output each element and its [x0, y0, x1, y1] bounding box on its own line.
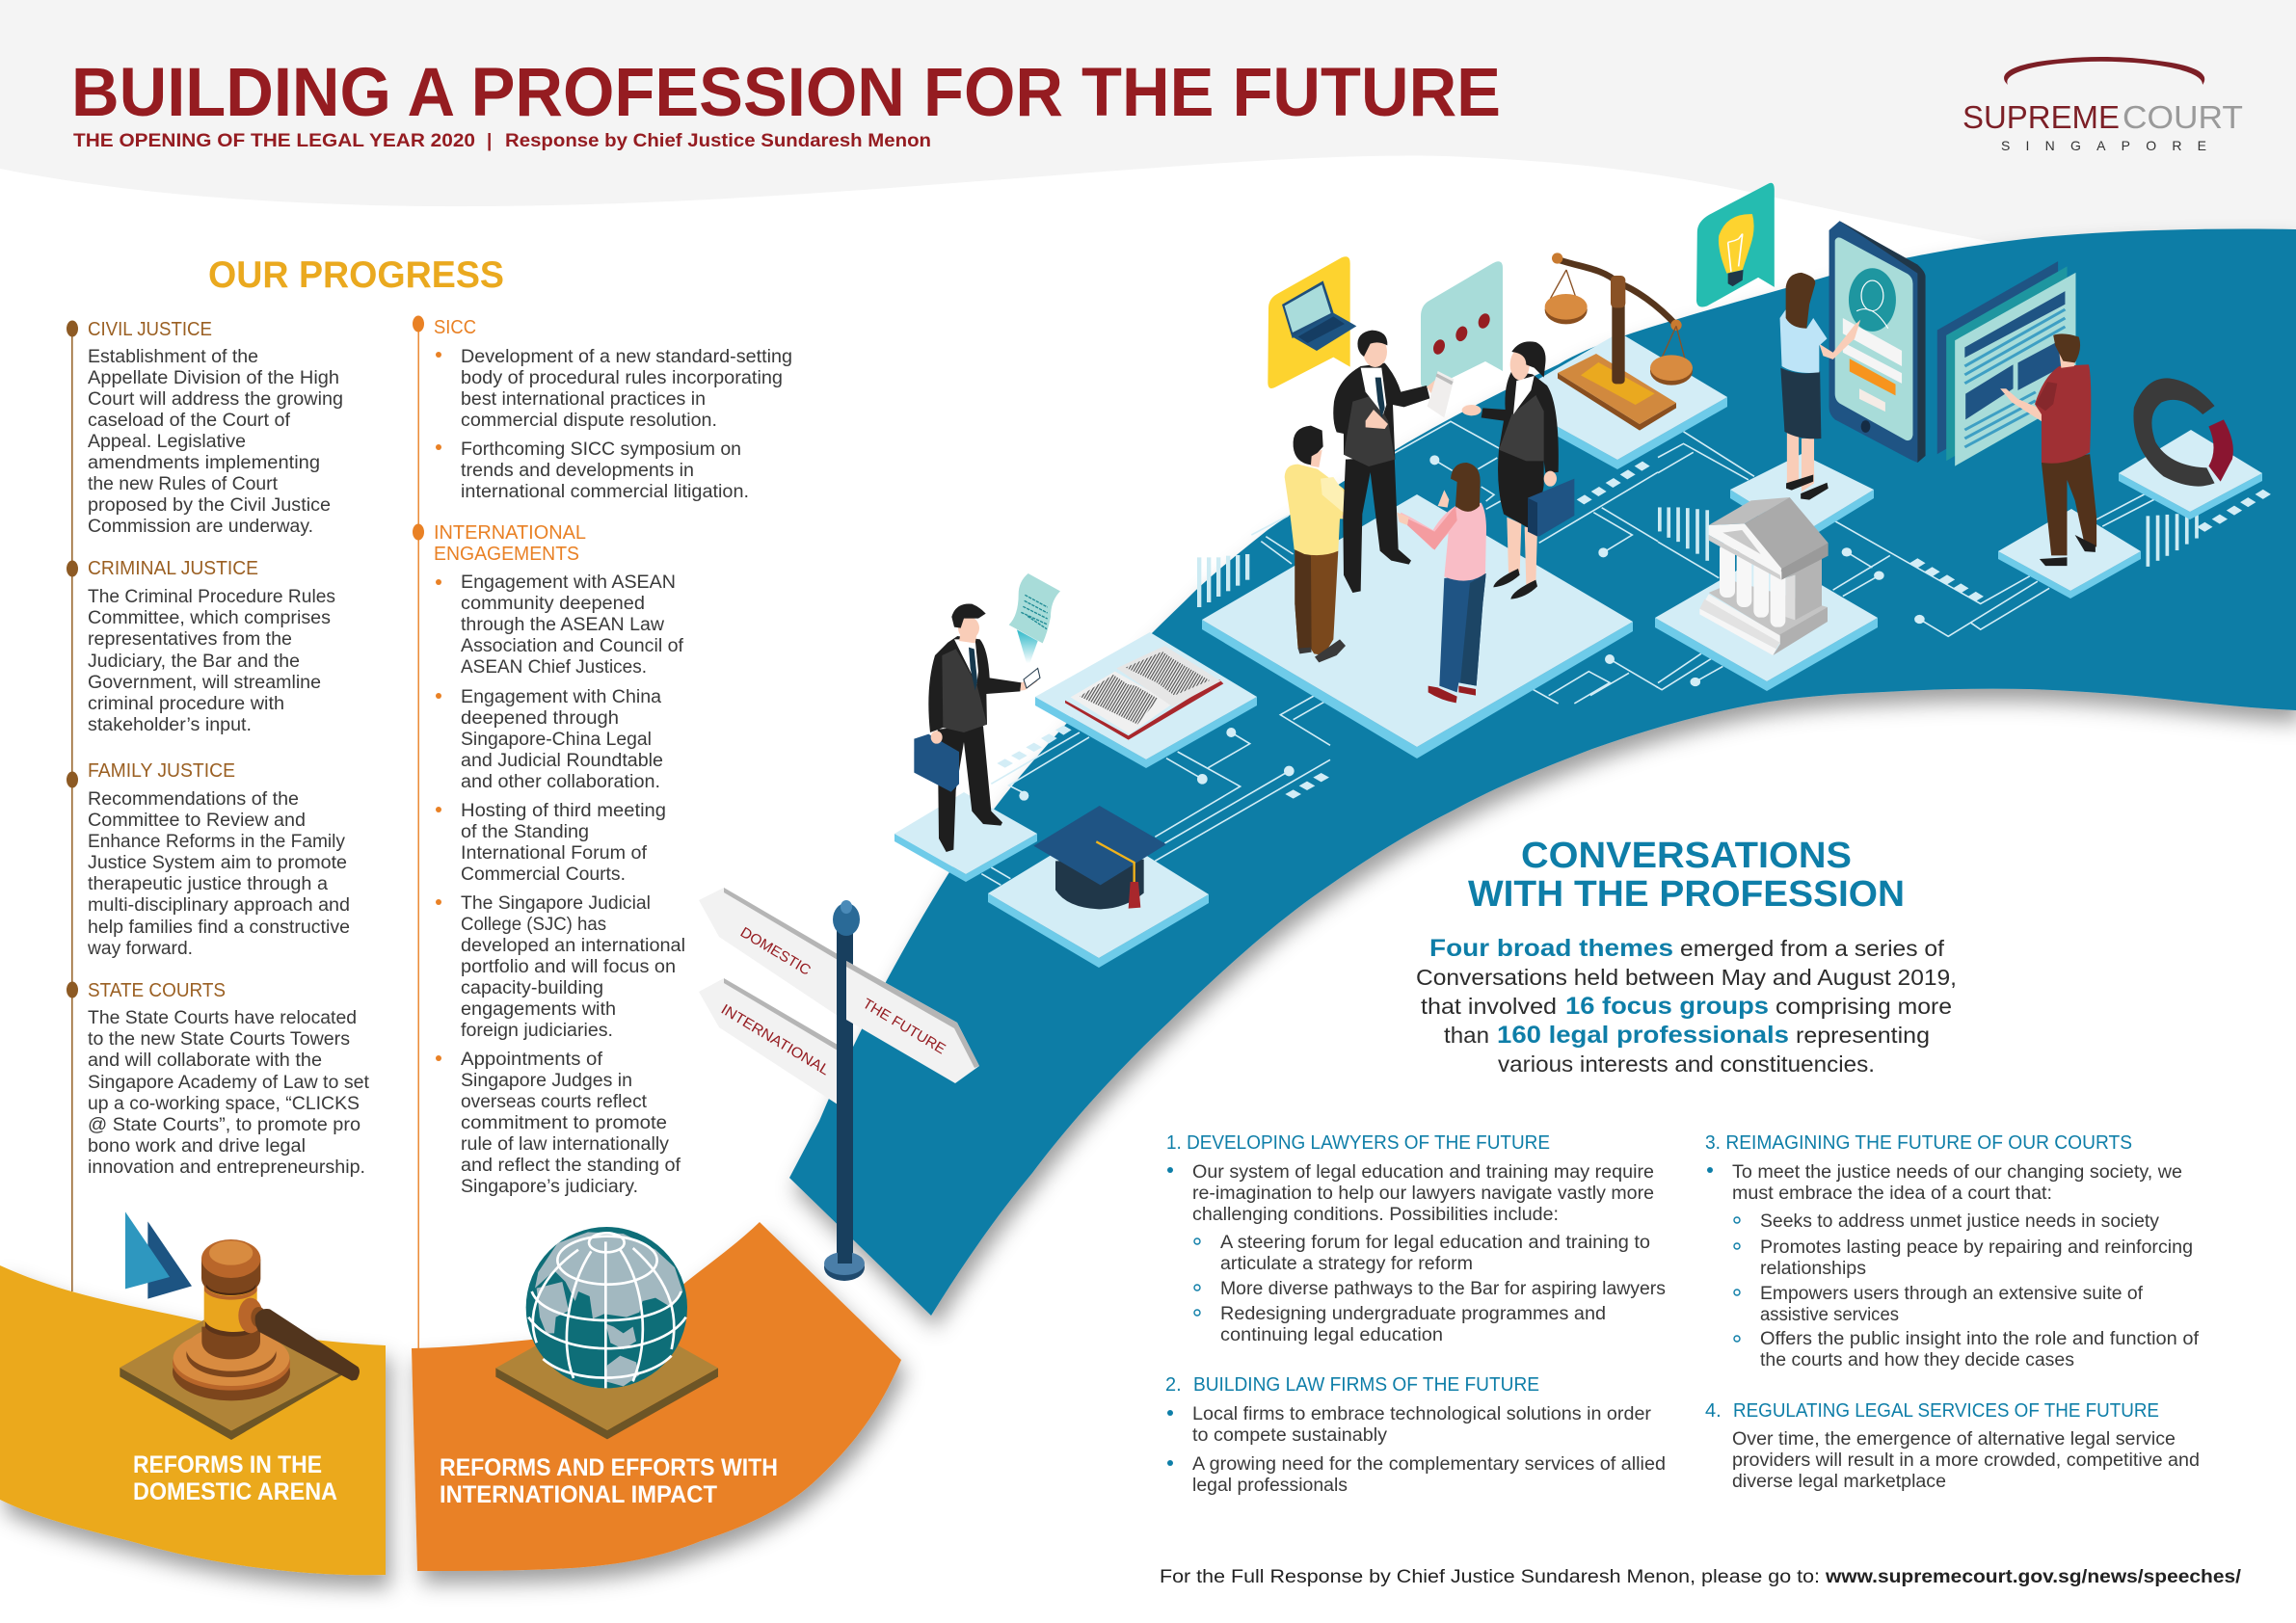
- icon: floating document: [1009, 573, 1060, 663]
- icon: courthouse: [1699, 497, 1829, 655]
- text block: international engagements: Singapore-China Legal: [461, 730, 652, 750]
- text block: SICC: international commercial litigation.: [461, 482, 749, 502]
- logo: Supreme Court Singapore: SUPREME: [1962, 99, 2120, 135]
- text block: international engagements: Singapore’s judiciary.: [461, 1177, 638, 1197]
- text block: theme 1: More diverse pathways to the Bar for aspiring lawyers: [1220, 1279, 1666, 1299]
- circuit lines and stripes: [981, 421, 2271, 885]
- icon: paper handed over: [1428, 371, 1454, 417]
- icon: globe on base: [495, 1227, 718, 1439]
- text block: state courts: and will collaborate with the: [88, 1051, 322, 1071]
- text block: theme 2: [1165, 1374, 1666, 1496]
- platform: chart: [2119, 430, 2262, 519]
- label: reforms in the domestic arena: REFORMS IN THE: [133, 1451, 322, 1478]
- text block: international engagements: College (SJC) has: [461, 915, 606, 935]
- text block: criminal justice: The Criminal Procedure Rules: [88, 587, 335, 607]
- text block: civil justice: Appeal. Legislative: [88, 432, 246, 452]
- label: reforms in the domestic arena: DOMESTIC ARENA: [133, 1478, 337, 1505]
- text block: international engagements: engagements with: [461, 999, 616, 1020]
- text block: theme 3: relationships: [1760, 1259, 1866, 1279]
- text block: theme 2: A growing need for the complementary services of allied: [1192, 1454, 1666, 1475]
- text block: SICC: Forthcoming SICC symposium on: [461, 439, 741, 460]
- platform: main: [1202, 494, 1633, 758]
- text block: international engagements: Singapore Judges in: [461, 1071, 632, 1091]
- panel: yellow domestic band: [0, 1265, 386, 1575]
- text block: conversations intro: Four broad themes: [1429, 935, 1673, 962]
- text block: conversations intro: [1416, 935, 1957, 1077]
- text block: conversations intro: 160 legal professionals: [1497, 1022, 1789, 1049]
- icon: webpage panels: [1937, 261, 2075, 466]
- heading: conversations with the profession: CONVERSATIONS: [1521, 836, 1852, 876]
- figure: woman in black suit: [1462, 341, 1574, 599]
- text block: criminal justice: representatives from the: [88, 629, 292, 650]
- text block: international engagements: community deepened: [461, 594, 645, 614]
- subtitle: |: [487, 131, 492, 151]
- text block: conversations intro: comprising more: [1775, 994, 1952, 1019]
- text block: theme 3: must embrace the idea of a court that:: [1732, 1184, 2052, 1204]
- label: reforms with international impact: INTERNATIONAL IMPACT: [440, 1481, 717, 1508]
- text block: civil justice: [88, 319, 343, 537]
- text block: theme 3: Offers the public insight into the role and function of: [1760, 1329, 2200, 1349]
- text block: theme 1: articulate a strategy for reform: [1220, 1254, 1473, 1274]
- footer: link to full response: www.supremecourt.gov.sg/news/speeches/: [1825, 1567, 2242, 1587]
- text block: family justice: help families find a constructive: [88, 918, 350, 938]
- icon: graduation cap: [1033, 806, 1166, 909]
- text block: theme 2: BUILDING LAW FIRMS OF THE FUTURE: [1193, 1374, 1539, 1396]
- text block: international engagements: ASEAN Chief Justices.: [461, 657, 647, 678]
- text block: state courts: STATE COURTS: [88, 980, 226, 1001]
- text block: state courts: [88, 980, 370, 1178]
- sign: the future: [846, 961, 979, 1083]
- text block: international engagements: and reflect the standing of: [461, 1156, 681, 1176]
- heading: conversations with the profession: WITH THE PROFESSION: [1468, 874, 1905, 915]
- text block: international engagements: overseas courts reflect: [461, 1092, 648, 1112]
- text block: international engagements: INTERNATIONAL: [434, 522, 586, 544]
- text block: SICC: Development of a new standard-setting: [461, 347, 792, 367]
- text block: state courts: to the new State Courts Towers: [88, 1029, 350, 1050]
- text block: international engagements: foreign judiciaries.: [461, 1021, 613, 1041]
- text block: theme 4: [1705, 1400, 2200, 1492]
- icon: donut chart: [2133, 378, 2233, 487]
- text block: theme 1: Our system of legal education and training may require: [1192, 1162, 1654, 1183]
- platform: courthouse: [1655, 553, 1878, 691]
- text block: international engagements: through the ASEAN Law: [461, 615, 664, 635]
- figure: woman at phone: [1780, 273, 1860, 500]
- text block: civil justice: amendments implementing: [88, 453, 320, 473]
- text block: criminal justice: Committee, which comprises: [88, 608, 331, 628]
- platform: scales: [1506, 333, 1727, 469]
- text block: civil justice: Establishment of the: [88, 347, 258, 367]
- subtitle: Response by Chief Justice Sundaresh Menon: [505, 131, 931, 151]
- figure: man in black suit: [1333, 331, 1436, 593]
- text block: conversations intro: Conversations held between May and August 2019,: [1416, 965, 1957, 990]
- text block: theme 2: legal professionals: [1192, 1476, 1348, 1496]
- text block: SICC: body of procedural rules incorporating: [461, 368, 783, 388]
- text block: family justice: multi-disciplinary approach and: [88, 895, 350, 916]
- text block: international engagements: The Singapore Judicial: [461, 893, 651, 914]
- label: reforms with international impact: REFORMS AND EFFORTS WITH: [440, 1454, 778, 1481]
- text block: family justice: Enhance Reforms in the Family: [88, 832, 345, 852]
- figure: man in red shirt: [2000, 333, 2096, 566]
- text block: theme 3: Promotes lasting peace by repairing and reinforcing: [1760, 1237, 2193, 1258]
- text block: civil justice: the new Rules of Court: [88, 474, 279, 494]
- text block: international engagements: Engagement with ASEAN: [461, 572, 676, 593]
- text block: conversations intro: that involved: [1421, 994, 1557, 1019]
- text block: theme 3: Seeks to address unmet justice needs in society: [1760, 1211, 2159, 1232]
- text block: international engagements: [434, 522, 685, 1197]
- figure: man in yellow shirt: [1285, 426, 1356, 662]
- logo: Supreme Court Singapore: [1962, 57, 2243, 153]
- footer: link to full response: [1160, 1567, 2242, 1587]
- text block: international engagements: Hosting of third meeting: [461, 801, 666, 821]
- text block: family justice: Committee to Review and: [88, 811, 306, 831]
- text block: international engagements: rule of law internationally: [461, 1134, 670, 1155]
- text block: international engagements: deepened through: [461, 708, 619, 729]
- platform: graduation cap: [988, 826, 1209, 968]
- text block: SICC: commercial dispute resolution.: [461, 411, 717, 431]
- signpost: [699, 888, 979, 1281]
- text block: state courts: Singapore Academy of Law to set: [88, 1073, 370, 1093]
- text block: family justice: way forward.: [87, 939, 193, 959]
- pole: [837, 916, 853, 1264]
- text block: international engagements: commitment to promote: [461, 1113, 667, 1133]
- text block: criminal justice: stakeholder’s input.: [88, 715, 252, 735]
- platform: book: [1035, 632, 1257, 768]
- subtitle: THE OPENING OF THE LEGAL YEAR 2020: [73, 131, 475, 151]
- text block: theme 4: providers will result in a more crowded, competitive and: [1732, 1450, 2200, 1471]
- text block: international engagements: Commercial Courts.: [461, 865, 626, 885]
- text block: theme 1: 1. DEVELOPING LAWYERS OF THE FUTURE: [1166, 1132, 1550, 1154]
- panel: orange international band: [412, 1222, 901, 1571]
- text block: international engagements: portfolio and will focus on: [461, 957, 676, 977]
- logo: Supreme Court Singapore: COURT: [2122, 99, 2243, 135]
- icon: lightbulb bubble: [1696, 183, 1775, 307]
- sign: the future: THE FUTURE: [860, 996, 948, 1057]
- text block: criminal justice: Government, will streamline: [88, 673, 321, 693]
- label: reforms in the domestic arena: [133, 1451, 337, 1505]
- text block: civil justice: Commission are underway.: [88, 517, 313, 537]
- heading: conversations with the profession: [1468, 836, 1905, 915]
- text block: theme 2: Local firms to embrace technological solutions in order: [1192, 1404, 1652, 1424]
- text block: family justice: Recommendations of the: [88, 789, 299, 810]
- text block: international engagements: Association and Council of: [461, 636, 684, 656]
- text block: international engagements: and Judicial Roundtable: [461, 751, 663, 771]
- text block: theme 4: diverse legal marketplace: [1732, 1472, 1946, 1492]
- figure: man with smartphone: [914, 603, 1040, 852]
- text block: civil justice: CIVIL JUSTICE: [88, 319, 212, 340]
- subtitle: [73, 131, 931, 151]
- text block: conversations intro: 16 focus groups: [1565, 993, 1769, 1020]
- text block: state courts: @ State Courts”, to promote pro: [88, 1115, 360, 1135]
- text block: civil justice: Court will address the growing: [88, 389, 343, 410]
- icon: blue triangles: [125, 1211, 192, 1299]
- text block: state courts: up a co-working space, “CLICKS: [88, 1094, 360, 1114]
- text block: SICC: [434, 317, 792, 502]
- text block: theme 1: Redesigning undergraduate programmes and: [1220, 1304, 1606, 1324]
- footer: link to full response: For the Full Response by Chief Justice Sundaresh Menon, please go to:: [1160, 1567, 1820, 1587]
- icon: smartphone login: [1829, 221, 1926, 463]
- title: BUILDING A PROFESSION FOR THE FUTURE: [71, 55, 1501, 131]
- text block: family justice: FAMILY JUSTICE: [88, 760, 235, 782]
- text block: civil justice: proposed by the Civil Justice: [88, 495, 331, 516]
- text block: family justice: therapeutic justice through a: [88, 874, 328, 894]
- text block: theme 4: Over time, the emergence of alternative legal service: [1732, 1429, 2176, 1450]
- text block: theme 2: to compete sustainably: [1192, 1425, 1388, 1446]
- text block: theme 4: REGULATING LEGAL SERVICES OF THE FUTURE: [1733, 1400, 2159, 1422]
- icon: yellow laptop bubble: [1268, 256, 1356, 388]
- text block: theme 2: 2.: [1165, 1374, 1182, 1396]
- text block: state courts: innovation and entrepreneurship.: [88, 1157, 365, 1178]
- text block: international engagements: of the Standing: [461, 822, 589, 842]
- timeline: international column line: [413, 316, 424, 1349]
- text block: SICC: trends and developments in: [461, 461, 694, 481]
- text block: SICC: best international practices in: [461, 389, 706, 410]
- sign: international: [699, 978, 838, 1104]
- text block: state courts: bono work and drive legal: [88, 1136, 306, 1157]
- text block: international engagements: Appointments of: [461, 1050, 603, 1070]
- sign: domestic: [699, 888, 838, 1016]
- platform: man with phone: [894, 792, 1037, 882]
- text block: international engagements: capacity-building: [461, 978, 603, 998]
- panel: blue isometric wave: [789, 228, 2296, 1316]
- text block: criminal justice: CRIMINAL JUSTICE: [88, 558, 258, 579]
- text block: conversations intro: representing: [1796, 1023, 1930, 1048]
- text block: criminal justice: [88, 558, 335, 735]
- text block: international engagements: and other collaboration.: [461, 772, 660, 792]
- icon: scales of justice: [1545, 253, 1693, 431]
- text block: theme 1: continuing legal education: [1220, 1325, 1443, 1345]
- text block: theme 1: A steering forum for legal education and training to: [1220, 1233, 1650, 1253]
- heading: our progress: OUR PROGRESS: [208, 254, 504, 296]
- text block: international engagements: Engagement with China: [461, 687, 661, 707]
- label: reforms with international impact: [440, 1454, 778, 1508]
- text block: criminal justice: Judiciary, the Bar and the: [88, 652, 300, 672]
- text block: theme 1: challenging conditions. Possibilities include:: [1192, 1205, 1559, 1225]
- sign: domestic: DOMESTIC: [737, 924, 814, 979]
- figure: woman in pink: [1397, 463, 1486, 703]
- text block: conversations intro: various interests and constituencies.: [1498, 1051, 1875, 1077]
- icon: open book: [1065, 646, 1223, 740]
- text block: international engagements: International Forum of: [461, 843, 648, 864]
- text block: international engagements: developed an international: [461, 936, 685, 956]
- text block: family justice: Justice System aim to promote: [88, 853, 347, 873]
- text block: theme 3: To meet the justice needs of our changing society, we: [1732, 1162, 2182, 1183]
- icon: chat bubble: [1421, 261, 1503, 389]
- logo: Supreme Court Singapore: SINGAPORE: [2001, 138, 2206, 153]
- text block: civil justice: caseload of the Court of: [88, 411, 291, 431]
- text block: conversations intro: than: [1444, 1023, 1489, 1048]
- text block: theme 1: re-imagination to help our lawyers navigate vastly more: [1192, 1184, 1654, 1204]
- text block: theme 3: 3. REIMAGINING THE FUTURE OF OUR COURTS: [1705, 1132, 2132, 1154]
- text block: state courts: The State Courts have relocated: [88, 1008, 357, 1028]
- text block: theme 4: 4.: [1705, 1400, 1722, 1422]
- text block: SICC: SICC: [434, 317, 476, 338]
- text block: theme 3: Empowers users through an extensive suite of: [1760, 1284, 2144, 1304]
- text block: civil justice: Appellate Division of the High: [88, 368, 339, 388]
- platform: red shirt man: [1998, 509, 2141, 599]
- text block: theme 3: the courts and how they decide cases: [1760, 1350, 2074, 1370]
- text block: theme 3: [1705, 1132, 2200, 1370]
- sign: international: INTERNATIONAL: [718, 1001, 832, 1078]
- text block: international engagements: ENGAGEMENTS: [434, 544, 579, 565]
- timeline: domestic column line: [67, 320, 78, 1291]
- text block: theme 1: [1166, 1132, 1666, 1345]
- icon: gavel on base: [120, 1239, 360, 1440]
- text block: criminal justice: criminal procedure with: [88, 694, 284, 714]
- text block: conversations intro: emerged from a series of: [1680, 936, 1945, 961]
- platform: phone woman: [1730, 454, 1874, 543]
- text block: family justice: [87, 760, 350, 959]
- text block: theme 3: assistive services: [1760, 1305, 1899, 1325]
